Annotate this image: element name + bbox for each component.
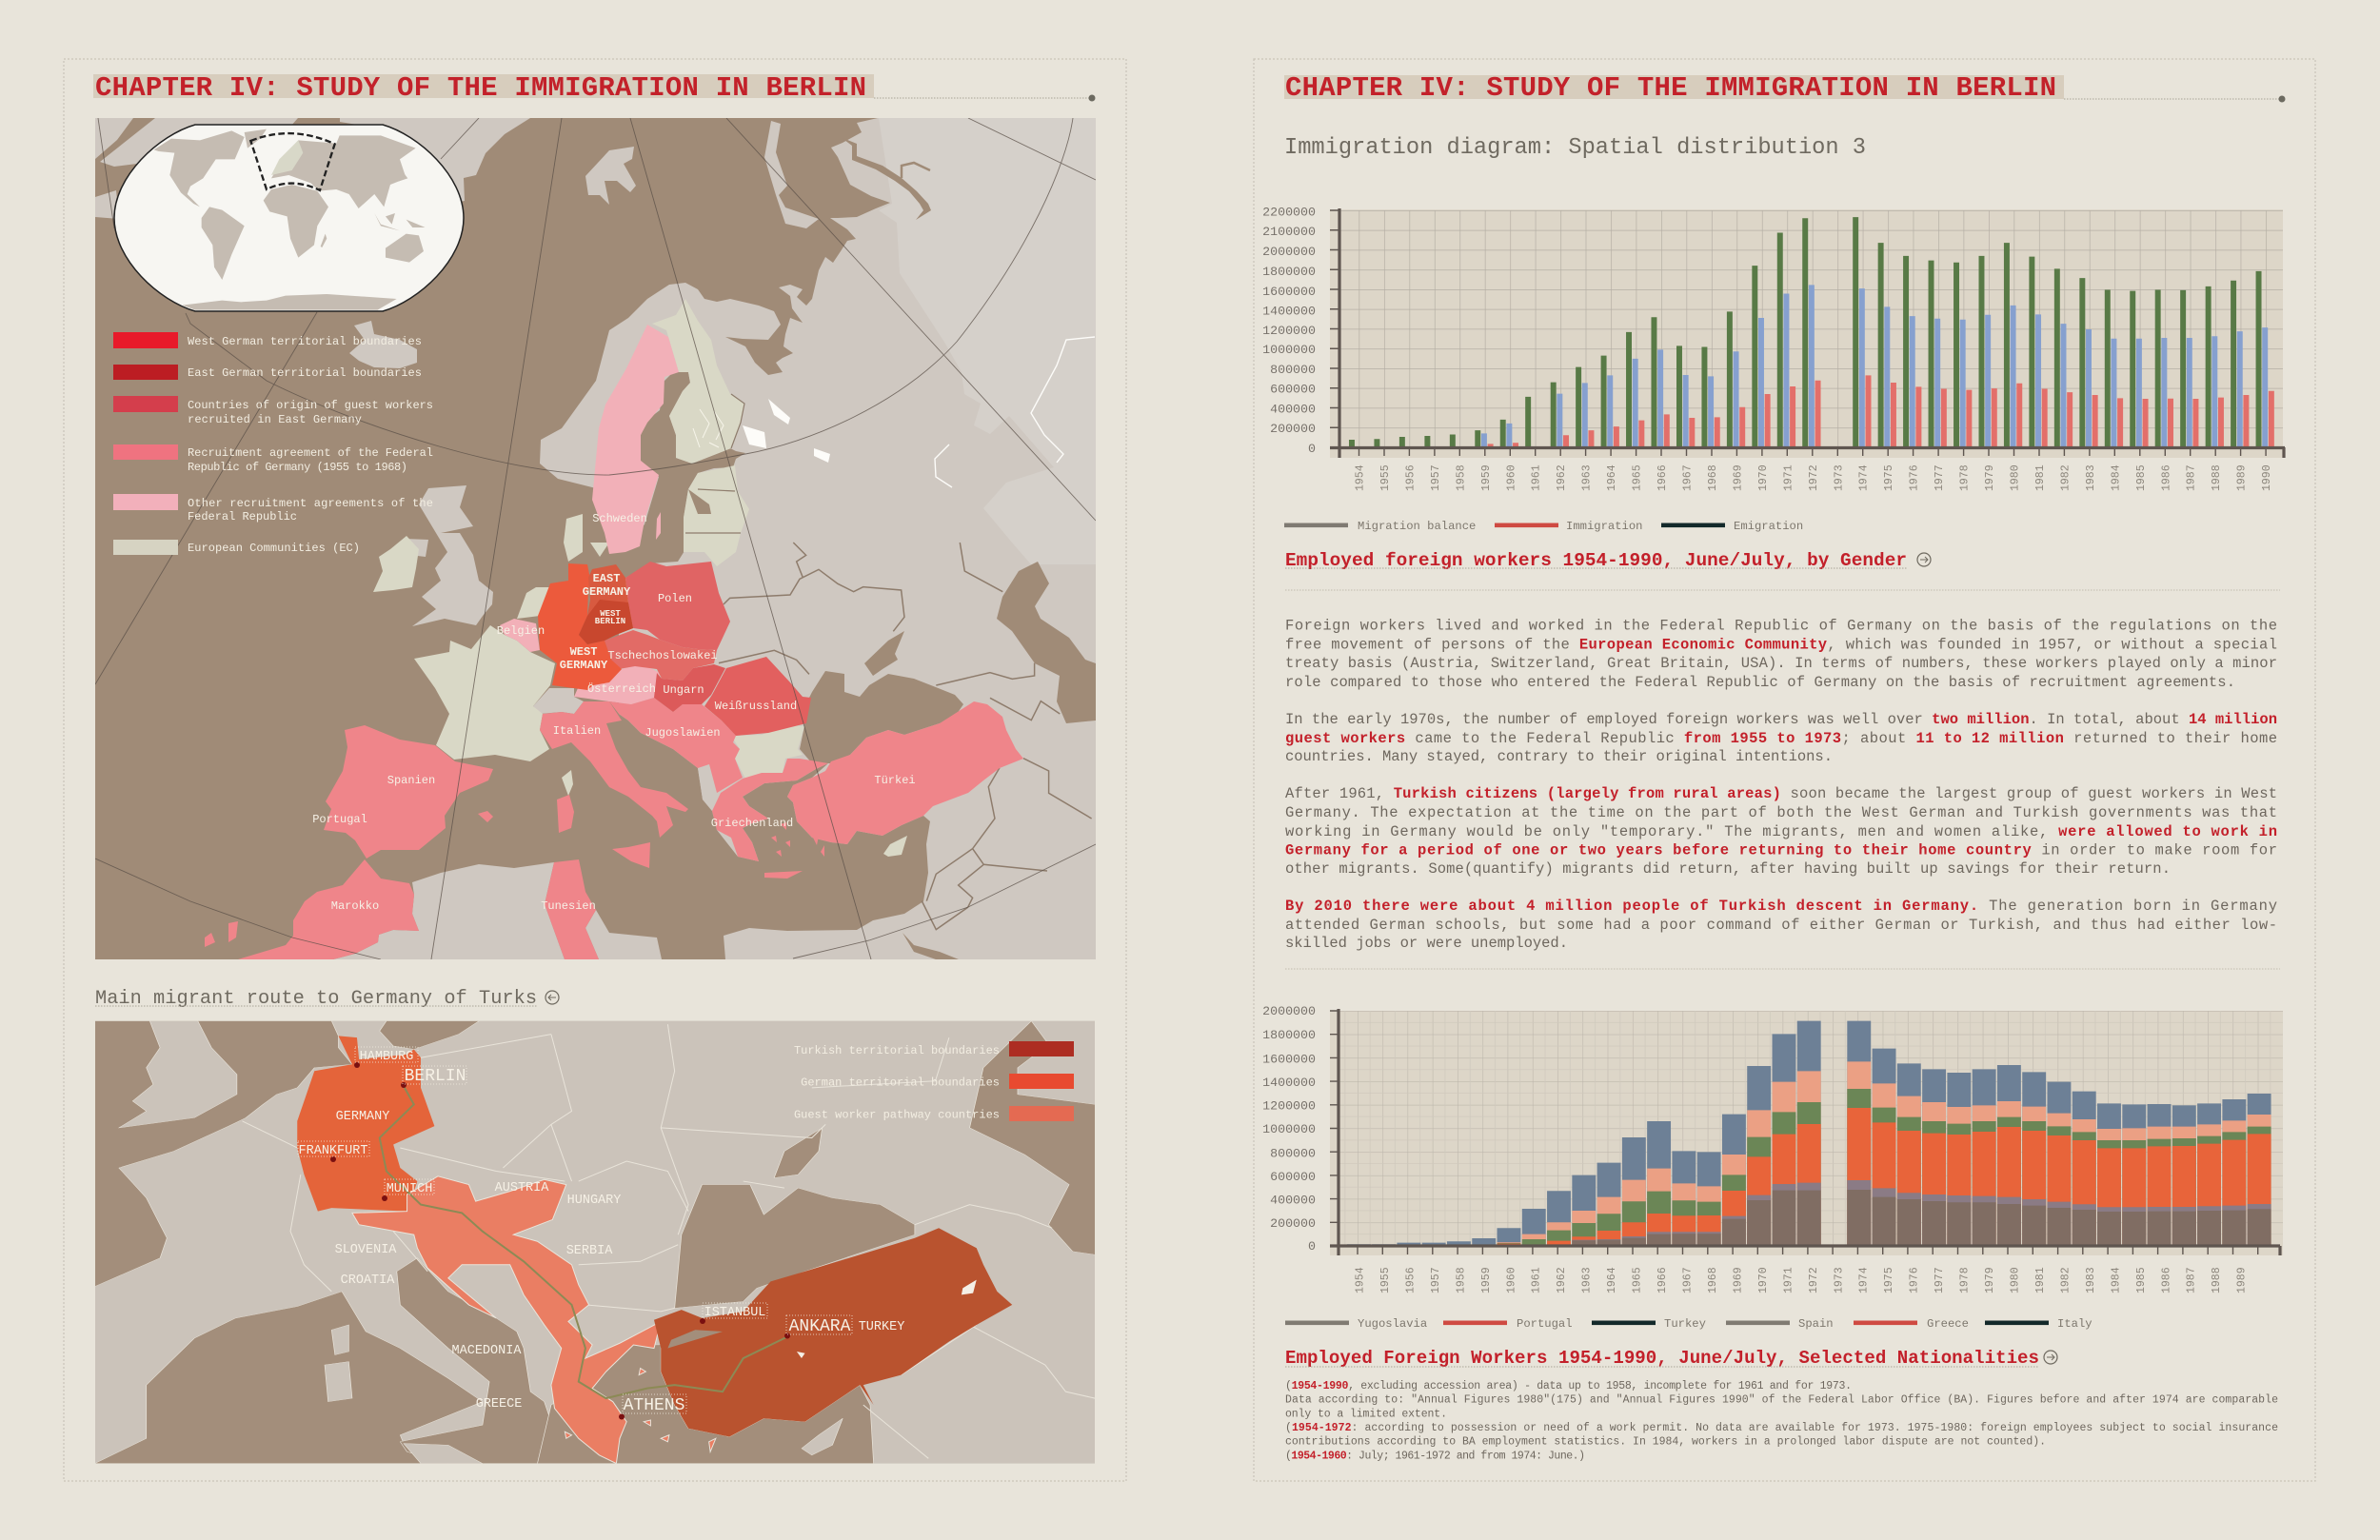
city label boxes [298,1047,852,1413]
other agreements (light pink) [500,325,679,704]
x axis labels: 1954 [1354,464,1367,491]
country labels: Italien [553,724,601,738]
series: women (red) [1488,375,2274,447]
x axis labels: 1960 [1505,464,1517,491]
x axis labels: 1978 [1959,464,1972,491]
x axis labels: 1967 [1681,464,1695,491]
country labels: BERLIN [595,617,625,626]
legend: map of Europe: Federal Republic [188,510,297,523]
y axis labels: 1800000 [1262,1028,1316,1042]
country labels: GERMANY [583,585,631,599]
country labels: WEST [600,609,621,619]
legend: nationalities chart: Portugal [1517,1317,1573,1331]
x axis labels: 1969 [1732,464,1744,491]
legend: gender chart [1284,520,1803,533]
x axis labels: 1963 [1581,464,1594,491]
legend: gender chart: Migration balance [1358,520,1476,533]
y axis labels: 200000 [1270,422,1316,436]
x axis labels: 1966 [1656,1267,1669,1293]
left page frame [64,59,1126,1481]
x axis labels: 1984 [2110,464,2122,491]
y axis labels: 1400000 [1262,305,1316,318]
text block: body copy: skilled jobs or were unemployed. [1285,935,1568,952]
y axis labels: 1000000 [1262,1122,1316,1136]
legend: map of Europe: European Communities (EC) [188,542,360,555]
map labels: ATHENS [624,1396,684,1415]
y axis labels: 1600000 [1262,285,1316,299]
West Germany and East Germany [538,563,633,690]
Germany [297,1036,434,1212]
map labels: MUNICH [387,1182,432,1196]
series: total (green) [1349,217,2262,447]
x axis labels: 1983 [2085,1267,2097,1293]
legend: map of Europe: Other recruitment agreements of the [188,497,433,510]
x axis labels: 1965 [1632,464,1644,491]
x axis labels: 1979 [1984,464,1996,491]
legend: nationalities chart [1285,1317,2092,1331]
y axis labels: 800000 [1270,1146,1316,1161]
x axis labels: 1968 [1707,1267,1719,1293]
legend: gender chart: Emigration [1734,520,1803,533]
x axis labels: 1981 [2034,1267,2047,1293]
text block: body copy: working in Germany would be only "temporary." The migrants, men and women alike, were allowed to work in [1285,823,2277,840]
EC countries [373,299,907,857]
Turkey [654,1228,1012,1437]
x axis labels: 1975 [1883,464,1895,491]
x axis labels: 1987 [2186,1267,2198,1293]
y axis labels: 0 [1308,1239,1316,1254]
panel: right page [1254,59,2315,1481]
text block: body copy [1285,617,2277,952]
country labels: Türkei [874,774,916,787]
series: Spain [1497,1089,2271,1246]
map labels: SERBIA [566,1244,613,1258]
x axis labels: 1976 [1909,1267,1921,1293]
y axis labels: 400000 [1270,1194,1316,1207]
x axis labels: 1972 [1808,1267,1820,1293]
x axis labels: 1973 [1833,1267,1845,1293]
text block: body copy: guest workers came to the Federal Republic from 1955 to 1973; about 11 to 12 million returned to their home [1285,730,2277,747]
legend: nationalities chart: Greece [1927,1317,1969,1331]
y axis labels: 0 [1308,442,1316,456]
x axis labels: 1962 [1556,1267,1568,1293]
y axis labels: 1800000 [1262,265,1316,279]
series: men (blue) [1481,285,2268,447]
x axis labels: 1975 [1883,1267,1895,1293]
right page frame [1254,59,2315,1481]
x axis labels: 1959 [1480,464,1493,491]
legend: route map: Turkish territorial boundaries [794,1044,1000,1057]
graticule lines [95,118,1096,959]
country labels: Tschechoslowakei [607,649,718,662]
text block: body copy: treaty basis (Austria, Switzerland, Great Britain, USA). In terms of numbers, these workers played only a minor [1285,655,2277,672]
x axis labels: 1971 [1782,1267,1795,1293]
x axis labels: 1961 [1531,1267,1543,1293]
y axis labels: 2100000 [1262,225,1316,239]
map labels: CROATIA [341,1273,395,1288]
x axis labels [1354,464,2273,491]
y axis labels: 800000 [1270,363,1316,377]
country labels [312,512,916,913]
legend: map of Europe: Republic of Germany (1955 to 1968) [188,461,407,474]
x axis labels: 1990 [2261,464,2273,491]
text block: body copy: By 2010 there were about 4 million people of Turkish descent in Germany. The generation born in Germany [1285,898,2277,915]
x axis labels: 1982 [2059,1267,2072,1293]
guest worker pathway countries [352,1176,661,1464]
map labels: FRANKFURT [299,1144,367,1158]
text block: footnotes: (1954-1990, excluding accession area) - data up to 1958, incomplete for 1961 and for 1973. [1285,1380,1852,1392]
x axis labels: 1955 [1379,464,1392,491]
map labels [299,1050,904,1415]
x axis labels: 1960 [1505,1267,1517,1293]
x axis labels: 1971 [1782,464,1795,491]
map labels: TURKEY [859,1320,904,1334]
x axis labels: 1961 [1531,464,1543,491]
map labels: ISTANBUL [704,1306,765,1320]
legend: gender chart: Immigration [1566,520,1642,533]
heading: main migrant route: Main migrant route to Germany of Turks [95,988,537,1010]
heading: selected nationalities: Employed Foreign Workers 1954-1990, June/July, Selected Nationalities [1285,1348,2039,1369]
map labels: HAMBURG [360,1050,413,1064]
legend: nationalities chart: Turkey [1664,1317,1706,1331]
country labels: Polen [658,592,692,605]
x axis labels: 1988 [2211,1267,2223,1293]
country labels: EAST [593,572,620,585]
left title: CHAPTER IV: STUDY OF THE IMMIGRATION IN BERLIN [95,72,866,104]
x axis labels: 1986 [2160,464,2172,491]
y axis labels [1262,1004,1316,1254]
x axis labels: 1977 [1934,464,1946,491]
x axis labels: 1966 [1656,464,1669,491]
x axis labels: 1985 [2135,464,2148,491]
map labels: GERMANY [336,1110,389,1124]
y axis labels [1262,206,1316,456]
route line [380,1086,788,1398]
legend: map of Europe: recruited in East Germany [188,413,362,426]
x axis labels: 1982 [2059,464,2072,491]
y axis labels: 200000 [1270,1216,1316,1231]
y axis labels: 1200000 [1262,1098,1316,1114]
x axis labels: 1964 [1606,464,1618,491]
country labels: GERMANY [560,659,608,672]
recruitment countries (salmon pink) [205,698,1023,959]
y axis labels: 1200000 [1262,324,1316,338]
x axis labels: 1965 [1632,1267,1644,1293]
x axis labels: 1958 [1455,464,1467,491]
x axis labels: 1956 [1404,464,1417,491]
x axis labels: 1962 [1556,464,1568,491]
legend: map of Europe [113,332,433,555]
y axis labels: 600000 [1270,1170,1316,1184]
legend: nationalities chart: Spain [1798,1317,1834,1331]
x axis labels: 1989 [2236,464,2249,491]
x axis labels: 1983 [2085,464,2097,491]
country labels: Belgien [497,624,545,638]
text block: body copy: attended German schools, but some had a poor command of either German or Turkish, and thus had either low- [1285,917,2277,934]
y axis labels: 1400000 [1262,1076,1316,1090]
x axis labels: 1957 [1430,464,1442,491]
map labels: MACEDONIA [452,1344,522,1358]
text block: footnotes: contributions according to BA employment statistics. In 1984, workers in a prolonged labor dispute are not counted). [1285,1436,2046,1449]
x axis labels: 1973 [1833,464,1845,491]
text block: body copy: Germany. The expectation at the time on the part of both the West German and Turkish governments was that [1285,804,2277,821]
text block: body copy: Foreign workers lived and worked in the Federal Republic of Germany on the basis of the regulations on the [1285,617,2277,634]
text block: footnotes: (1954-1960: July; 1961-1972 and from 1974: June.) [1285,1450,1585,1462]
legend: nationalities chart: Yugoslavia [1358,1317,1427,1331]
text block: footnotes: (1954-1972: according to possession or need of a work permit. No data are available for 1973. 1975-1980: foreign employees subject to social insurance [1285,1422,2278,1434]
series: Portugal [1572,1180,2271,1246]
text block: footnotes [1285,1380,2278,1462]
country labels: Marokko [331,899,379,913]
text block: body copy: After 1961, Turkish citizens (largely from rural areas) soon became the largest group of guest workers in West [1285,785,2277,802]
x axis labels: 1986 [2160,1267,2172,1293]
text block: body copy: Germany for a period of one or two years before returning to their home country in order to make room for [1285,841,2277,859]
x axis labels: 1984 [2110,1267,2122,1293]
map labels: BERLIN [405,1067,466,1086]
x axis labels: 1981 [2034,464,2047,491]
x axis labels: 1974 [1858,464,1871,491]
x axis labels: 1987 [2186,464,2198,491]
series: Italy [1347,1021,2271,1246]
legend: map of Europe: West German territorial boundaries [188,335,422,348]
map labels: ANKARA [789,1317,851,1336]
x axis labels: 1978 [1959,1267,1972,1293]
x axis labels: 1959 [1480,1267,1493,1293]
x axis labels: 1988 [2211,464,2223,491]
text block: body copy: free movement of persons of the European Economic Community, which was founded in 1957, or without a special [1285,636,2277,653]
guest worker origin countries (East Germany) [605,562,811,736]
country labels: Portugal [312,813,367,826]
text block: body copy: role compared to those who entered the Federal Republic of Germany on the basis of recruitment agreements. [1285,674,2235,691]
y axis labels: 2000000 [1262,1004,1316,1018]
y axis labels: 2000000 [1262,245,1316,259]
y axis labels: 600000 [1270,383,1316,397]
legend: route map: German territorial boundaries [801,1076,1000,1089]
x axis labels: 1980 [2009,1267,2022,1293]
right title: CHAPTER IV: STUDY OF THE IMMIGRATION IN BERLIN [1285,72,2056,104]
country labels: Griechenland [711,817,793,830]
y axis labels: 400000 [1270,402,1316,416]
x axis labels: 1954 [1354,1267,1367,1293]
axes [1330,208,2285,458]
x axis labels: 1970 [1757,1267,1770,1293]
x axis labels [1354,1267,2249,1293]
map: Europe recruitment agreements [95,118,1096,959]
y axis labels: 1000000 [1262,343,1316,357]
country labels: Jugoslawien [645,726,721,740]
x axis labels: 1985 [2135,1267,2148,1293]
heading: employed foreign workers by gender: Employed foreign workers 1954-1990, June/July, by Gender [1285,550,1907,571]
text block: footnotes: only to a limited extent. [1285,1408,1447,1420]
panel: left page [64,59,1126,1481]
map labels: GREECE [476,1397,522,1412]
legend: route map [794,1041,1074,1121]
y axis labels: 1600000 [1262,1053,1316,1066]
text block: body copy: other migrants. Some(quantify) migrants did return, after having built up savings for their return. [1285,860,2171,878]
x axis labels: 1955 [1379,1267,1392,1293]
country labels: Tunesien [541,899,596,913]
cities [330,1062,790,1420]
x axis labels: 1968 [1707,464,1719,491]
series: Yugoslavia [1547,1190,2271,1246]
x axis labels: 1980 [2009,464,2022,491]
text block: body copy: countries. Many stayed, contrary to their original intentions. [1285,748,1833,765]
country labels: Schweden [592,512,647,525]
map: Turkish migrant route to Germany [95,1020,1096,1464]
legend: map of Europe: East German territorial boundaries [188,366,422,380]
x axis labels: 1989 [2236,1267,2249,1293]
inset: world locator map [114,125,464,311]
seas [95,1021,1095,1464]
map labels: HUNGARY [567,1194,621,1208]
x axis labels: 1957 [1430,1267,1442,1293]
country labels: Österreich [587,682,656,696]
country labels: Weißrussland [715,700,797,713]
country labels: Ungarn [663,683,704,697]
x axis labels: 1956 [1404,1267,1417,1293]
islands and United Kingdom [119,1021,843,1464]
legend: map of Europe: Recruitment agreement of the Federal [188,446,433,460]
legend: route map: Guest worker pathway countries [794,1108,1000,1121]
country labels: Spanien [387,774,435,787]
text block: body copy: In the early 1970s, the number of employed foreign workers was well over two million. In total, about 14 million [1285,711,2277,728]
x axis labels: 1979 [1984,1267,1996,1293]
x axis labels: 1970 [1757,464,1770,491]
subtitle: Immigration diagram: Spatial distribution 3 [1284,135,1866,161]
x axis labels: 1964 [1606,1267,1618,1293]
x axis labels: 1967 [1681,1267,1695,1293]
axes [1330,1009,2280,1255]
text block: footnotes: Data according to: "Annual Figures 1980"(175) and "Annual Figures 1990" of the Federal Labor Office (BA). Figures before and after 1974 are comparable [1285,1394,2278,1407]
country labels: WEST [570,645,597,659]
x axis labels: 1977 [1934,1267,1946,1293]
legend: map of Europe: Countries of origin of guest workers [188,399,433,412]
legend: nationalities chart: Italy [2057,1317,2092,1331]
y axis labels: 2200000 [1262,206,1316,219]
map labels: AUSTRIA [495,1181,549,1195]
stacked bar chart: selected nationalities [1262,1004,2283,1293]
map labels: SLOVENIA [335,1243,397,1257]
x axis labels: 1976 [1909,464,1921,491]
series: Greece [1497,1061,2271,1246]
x axis labels: 1972 [1808,464,1820,491]
bar chart: employed foreign workers by gender [1262,206,2285,491]
x axis labels: 1969 [1732,1267,1744,1293]
x axis labels: 1958 [1455,1267,1467,1293]
series: Turkey [1497,1108,2271,1246]
x axis labels: 1974 [1858,1267,1871,1293]
x axis labels: 1963 [1581,1267,1594,1293]
